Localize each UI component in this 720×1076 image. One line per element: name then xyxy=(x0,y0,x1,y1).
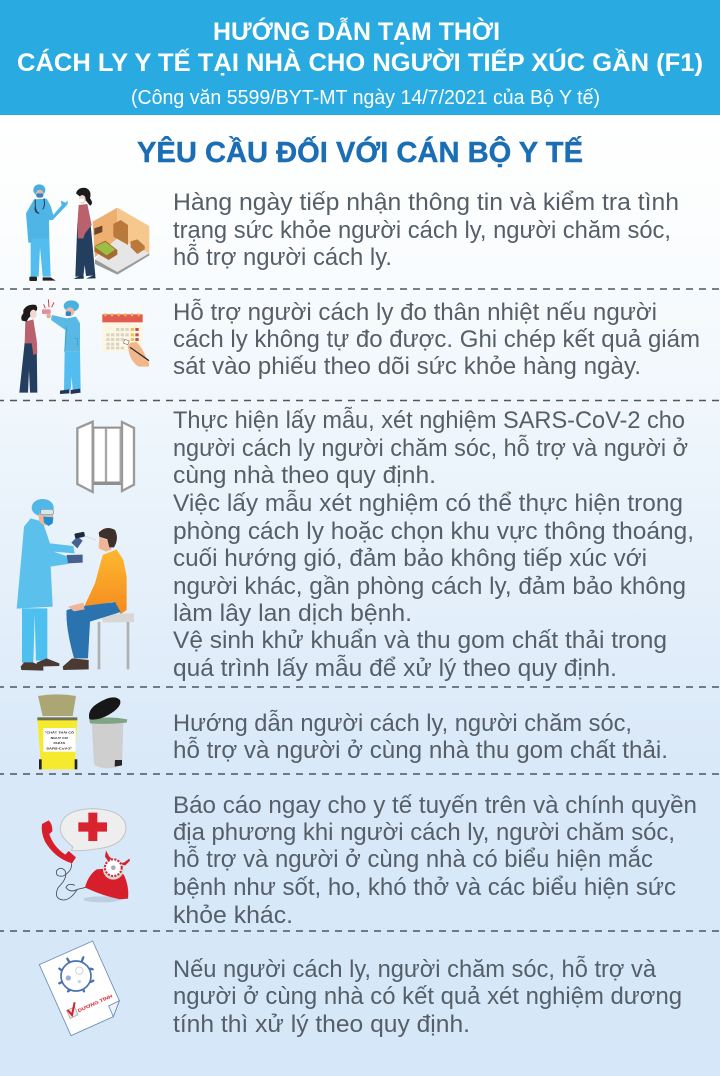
text block 4: Hướng dẫn người cách ly, người chăm sóc, xyxy=(173,710,632,737)
text block 3: cùng nhà theo quy định. xyxy=(173,462,436,489)
text block 3: Việc lấy mẫu xét nghiệm có thể thực hiện trong xyxy=(173,490,683,517)
yellow bin: CHỨA xyxy=(53,740,65,745)
header band xyxy=(0,0,720,115)
text block 1: trạng sức khỏe người cách ly, người chăm sóc, xyxy=(173,217,671,244)
title line 2: CÁCH LY Y TẾ TẠI NHÀ CHO NGƯỜI TIẾP XÚC GẦN (F1) xyxy=(17,47,703,77)
icon: temperature check and calendar xyxy=(19,299,149,394)
room xyxy=(93,208,149,275)
text block 2: cách ly không tự đo được. Ghi chép kết quả giám xyxy=(173,326,700,353)
text block 6 xyxy=(173,956,682,1038)
text block 3: quá trình lấy mẫu để xử lý theo quy định. xyxy=(173,655,617,682)
phone cord xyxy=(56,863,86,900)
woman xyxy=(19,305,37,393)
virus symbol xyxy=(59,957,93,991)
title line 1: HƯỚNG DẪN TẠM THỜI xyxy=(213,16,500,46)
speech bubble with red cross xyxy=(60,809,126,851)
positive checkbox label: DƯƠNG TÍNH xyxy=(76,991,114,1013)
text block 6: tính thì xử lý theo quy định. xyxy=(173,1011,470,1038)
icon: open window xyxy=(77,422,134,492)
text block 5: Báo cáo ngay cho y tế tuyến trên và chính quyền xyxy=(173,792,697,819)
text block 5: hỗ trợ và người ở cùng nhà có biểu hiện mắc xyxy=(173,846,653,873)
nurse xyxy=(46,300,81,394)
text block 5: bệnh như sốt, ho, khó thở và các biểu hiện sức xyxy=(173,874,676,901)
yellow bin xyxy=(37,694,77,769)
subtitle: (Công văn 5599/BYT-MT ngày 14/7/2021 của Bộ Y tế) xyxy=(131,87,600,109)
thermometer xyxy=(42,299,54,314)
doctor xyxy=(26,184,68,281)
section heading: YÊU CẦU ĐỐI VỚI CÁN BỘ Y TẾ xyxy=(137,135,583,169)
yellow bin: NGUY CƠ xyxy=(51,736,69,740)
patient xyxy=(63,528,127,670)
rotary telephone xyxy=(83,851,130,902)
text block 3: cuối hướng gió, đảm bảo không tiếp xúc với xyxy=(173,545,647,572)
yellow bin: "CHẤT THẢI CÓ xyxy=(45,730,75,735)
calendar with hand xyxy=(102,313,149,367)
icon: waste bins xyxy=(37,694,127,769)
grey pedal bin xyxy=(89,697,127,768)
woman xyxy=(74,188,96,279)
health worker xyxy=(17,499,96,671)
text block 1 xyxy=(173,189,679,271)
text block 1: hỗ trợ người cách ly. xyxy=(173,244,392,271)
stool xyxy=(98,613,134,669)
text block 3: người khác, gần phòng cách ly, đảm bảo không xyxy=(173,573,686,600)
icon: doctor with patient and room xyxy=(26,184,149,281)
text block 5: khỏe khác. xyxy=(173,902,293,929)
text block 5 xyxy=(173,792,697,929)
text block 3: Thực hiện lấy mẫu, xét nghiệm SARS-CoV-2 cho xyxy=(173,407,685,434)
text block 1: Hàng ngày tiếp nhận thông tin và kiểm tra tình xyxy=(173,189,679,216)
text block 6: Nếu người cách ly, người chăm sóc, hỗ trợ và xyxy=(173,956,657,983)
icon: health worker swabbing seated patient xyxy=(17,499,134,671)
text block 3: phòng cách ly hoặc chọn khu vực thông thoáng, xyxy=(173,518,694,545)
text block 3: Vệ sinh khử khuẩn và thu gom chất thải trong xyxy=(173,627,667,654)
text block 3 xyxy=(173,407,694,682)
handset xyxy=(42,820,76,863)
text block 3: người cách ly người chăm sóc, hỗ trợ và người ở xyxy=(173,435,688,462)
text block 4 xyxy=(173,710,668,764)
icon: positive test document xyxy=(39,941,119,1036)
text block 3: làm lây lan dịch bệnh. xyxy=(173,600,412,627)
text block 5: địa phương khi người cách ly, người chăm sóc, xyxy=(173,819,675,846)
text block 6: người ở cùng nhà có kết quả xét nghiệm dương xyxy=(173,983,682,1010)
text block 2: Hỗ trợ người cách ly đo thân nhiệt nếu người xyxy=(173,299,657,326)
text block 2: sát vào phiếu theo dõi sức khỏe hàng ngày. xyxy=(173,353,641,380)
icon: telephone and medical speech bubble xyxy=(42,809,130,902)
text block 4: hỗ trợ và người ở cùng nhà thu gom chất thải. xyxy=(173,737,668,764)
yellow bin: SARS-CoV-2" xyxy=(46,746,73,750)
text block 2 xyxy=(173,299,700,380)
